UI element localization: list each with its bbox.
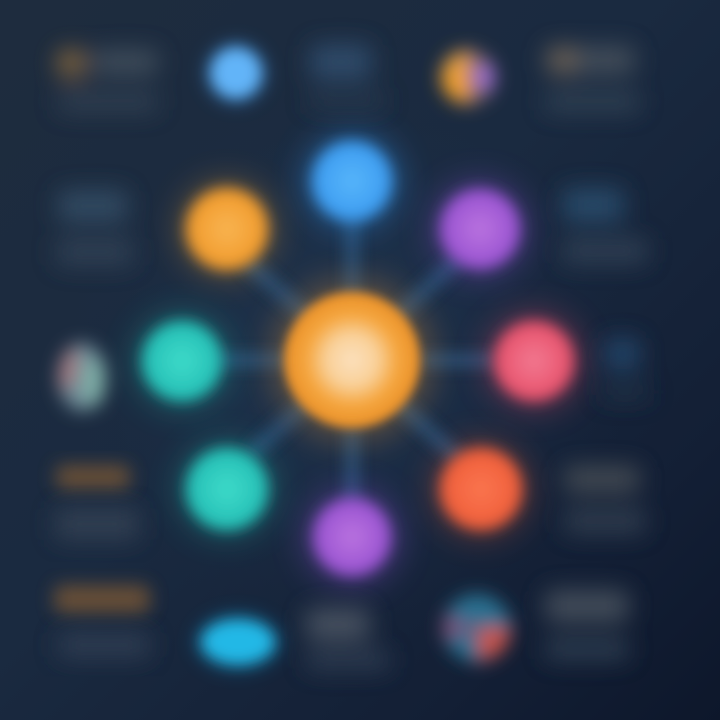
central glow: [70, 80, 630, 640]
text block: upper right: [562, 188, 648, 264]
connector lines: [220, 215, 490, 500]
text block: bottom left: [54, 585, 150, 613]
icon: top right multicolour circle: [441, 50, 495, 104]
icon: left multicolour circle: [58, 343, 106, 411]
text block: top centre: [308, 44, 386, 108]
node: top blue: [302, 131, 402, 231]
node: upper right purple: [430, 179, 530, 279]
text block: lower right: [564, 466, 646, 534]
node: right pink: [484, 311, 584, 411]
text block: right: [600, 338, 650, 400]
icon: bottom cyan pill: [194, 612, 282, 672]
text block: lower left caption: [55, 508, 139, 540]
text block: bottom centre: [306, 608, 390, 670]
icon: bottom right multicolour circle: [443, 594, 511, 662]
node: bottom purple: [302, 487, 402, 587]
node: lower left teal: [177, 439, 277, 539]
text block: top left: [57, 49, 158, 112]
text block: bottom right: [545, 590, 629, 660]
icon: top left blue circle: [204, 41, 268, 105]
node: upper left orange: [177, 179, 277, 279]
text block: upper left: [56, 190, 134, 266]
node: left teal: [132, 311, 232, 411]
text block: lower left: [56, 465, 130, 489]
node: lower right coral: [431, 439, 531, 539]
central hub: [270, 278, 434, 442]
text block: top right: [545, 46, 640, 112]
text block: bottom left caption: [58, 632, 150, 658]
